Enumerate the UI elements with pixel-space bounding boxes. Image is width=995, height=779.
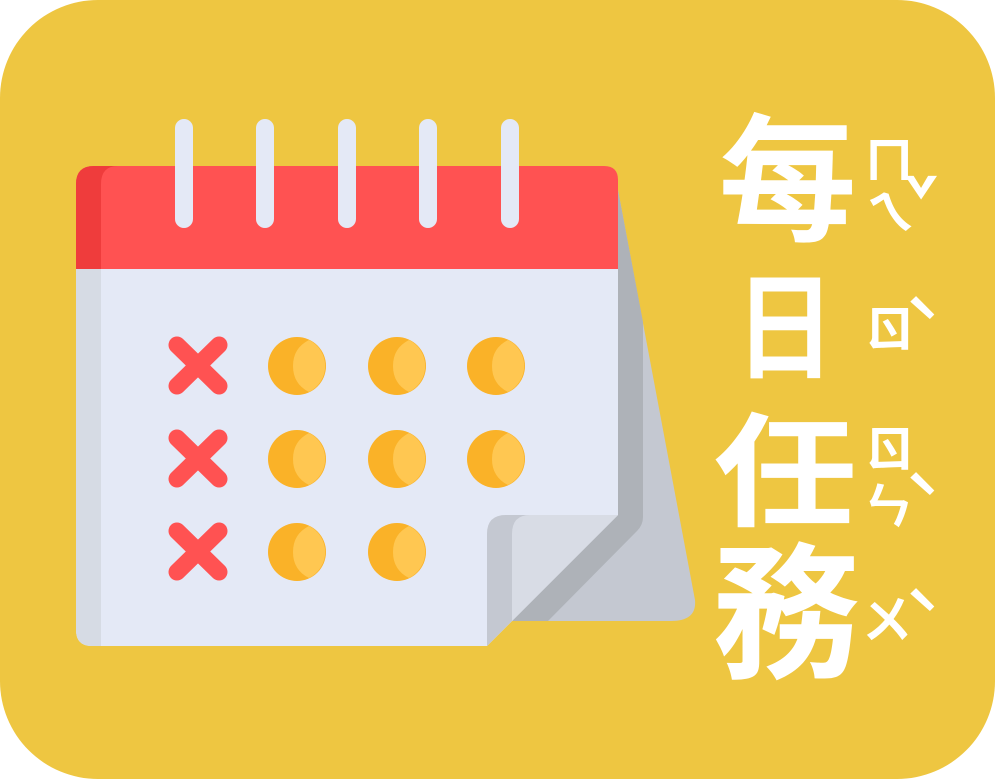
page curl (487, 515, 618, 646)
tone mark ˋ second: ˋ (905, 454, 939, 538)
title character 每: 每 (718, 106, 856, 260)
phonetic ㄨ: ㄨ (862, 581, 912, 653)
page curl shade (487, 515, 530, 646)
back page (510, 190, 695, 621)
tone mark ˇ: ˇ (904, 158, 938, 239)
phonetic ㄇ: ㄇ (864, 121, 914, 193)
tone mark ˋ third: ˋ (905, 570, 939, 654)
phonetic ㄟ: ㄟ (866, 173, 916, 245)
binder rings (175, 119, 519, 228)
red header left shade (76, 166, 118, 269)
calendar sheet (76, 268, 618, 646)
back page shadow (500, 190, 643, 621)
title character 任: 任 (714, 404, 856, 543)
coins row 3 (268, 523, 426, 581)
red header (76, 166, 618, 269)
tone mark ˋ: ˋ (905, 278, 939, 362)
title character 務: 務 (712, 534, 860, 699)
coins row 1 (268, 337, 525, 395)
sheet left shade (76, 268, 101, 646)
title: vertical heading with phonetic annotation (712, 106, 939, 699)
phonetic ㄖ: ㄖ (865, 290, 915, 362)
title character 日: 日 (735, 264, 834, 394)
red crosses (177, 345, 219, 572)
icon: calendar (76, 119, 695, 646)
coins row 2 (268, 430, 525, 488)
phonetic ㄣ: ㄣ (863, 467, 913, 539)
phonetic ㄖ second: ㄖ (865, 410, 915, 482)
